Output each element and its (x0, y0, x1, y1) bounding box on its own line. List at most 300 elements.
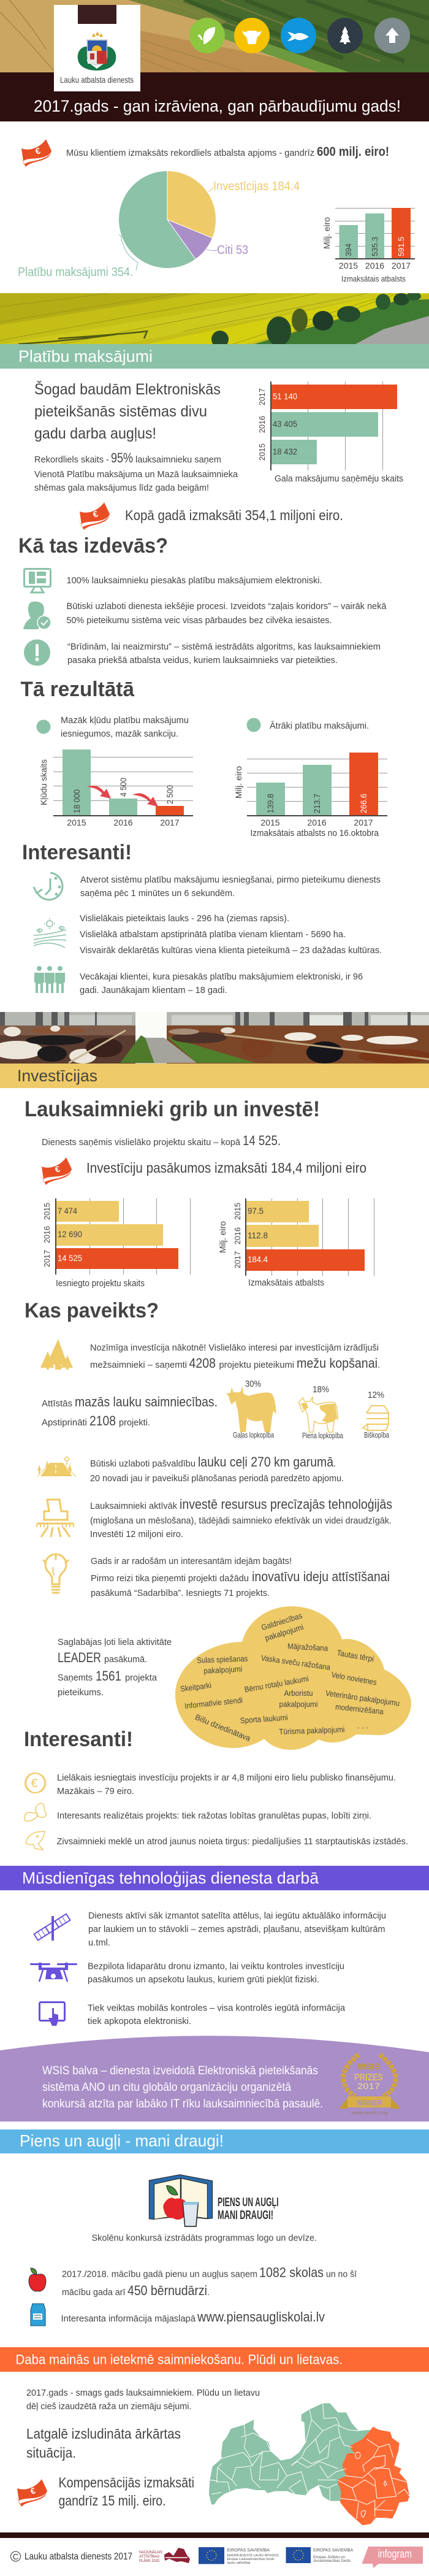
footer credit: C (13, 2552, 18, 2561)
text: Tiek veiktas mobilās kontroles – visa kontrolēs iegūtā informācija (88, 2003, 346, 2014)
logo: Nacionālais attīstības plāns: NACIONĀLAIS (139, 2550, 162, 2555)
icon: road (37, 1457, 76, 1477)
text: number of projects: Dienests saņēmis vislielāko projektu skaitu – kopā (42, 1137, 241, 1148)
intro text (66, 145, 389, 159)
item: precision technology (37, 1497, 392, 1539)
horizontal bar chart: investment support paid: 2016 (233, 1227, 242, 1244)
text (88, 2003, 346, 2026)
item: reminders (24, 639, 381, 666)
text: saņēma pēc 1 minūtes un 6 sekundēm. (80, 888, 235, 899)
icon: fish (281, 18, 316, 53)
bar chart: total support by year: 2016 (365, 261, 384, 270)
text (80, 875, 381, 899)
category icons row (189, 18, 410, 53)
text: number of projects: 14 525. (243, 1133, 281, 1148)
figure: dairy farming 18% (298, 1384, 344, 1440)
callout text: Investīciju pasākumos izmaksāti 184,4 miljoni eiro (86, 1160, 366, 1176)
heading: Interesanti! (investments): Interesanti! (24, 1728, 133, 1751)
text: Gads ir ar radošām un interesantām idejām bagāts! (91, 1556, 292, 1566)
text (80, 913, 382, 956)
text: . (207, 2287, 210, 2298)
icon: leaf (189, 18, 225, 53)
figure: beef farming 30%: Gaļas lopkopība (233, 1430, 275, 1439)
text: mežu kopšanai (297, 1355, 378, 1371)
fact: oldest and youngest clients (34, 966, 363, 995)
text block: record number: Rekordliels skaits - (34, 454, 109, 465)
text (66, 601, 387, 626)
word cloud: LEADER projects: Skeitparki (180, 1681, 212, 1693)
horizontal bar chart: submitted projects: 12 690 (58, 1229, 82, 1239)
text: Pirmo reizi tika pieņemti projekti dažādu (91, 1573, 249, 1584)
fact: largest field (34, 913, 382, 956)
text: number of projects (42, 1133, 281, 1148)
figure: dairy farming 18%: 18% (313, 1384, 329, 1395)
map: Latvia with affected municipalities (209, 2403, 409, 2525)
logo: EU maritime fund: EIROPAS SAVIENĪBA (313, 2548, 353, 2553)
text: Bezpilota lidaparātu dronu izmanto, lai veiktu kontroles investīciju (88, 1961, 344, 1971)
text: par laukiem un to stāvokli – zemes apstrādi, pļaušanu, atsevišķam kultūrām (88, 1924, 385, 1934)
horizontal bar chart: final payment recipients: 2016 (257, 416, 267, 433)
label: Investīcijas: Investīcijas 184.4 (213, 180, 300, 193)
bar chart: paid by 16 October: Milj. eiro (233, 766, 243, 799)
icon: money: € (34, 145, 42, 156)
callout text (59, 2474, 194, 2509)
icon: field (34, 918, 66, 948)
heading: Kā tas izdevās?: Kā tas izdevās? (18, 534, 168, 558)
photo: rapeseed field (0, 292, 429, 348)
word cloud: LEADER projects: Bišu dziedinātava (194, 1712, 252, 1743)
horizontal bar chart: investment support paid: 184.4 (248, 1254, 268, 1264)
section band: floods: Daba mainās un ietekmē saimniekošanu. Plūdi un lietavas. (16, 2352, 343, 2367)
award text: WSIS balva – dienesta izveidotā Elektroniskā pieteikšanās (42, 2064, 318, 2077)
text: LEADER: projekta (125, 1673, 158, 1683)
bar chart: paid by 16 October (233, 753, 387, 838)
logo: Nacionālais attīstības plāns (139, 2548, 190, 2563)
section band: Piens un augļi (0, 2129, 429, 2153)
text block: record number: Vienotā Platību maksājuma un Mazā lauksaimnieka (34, 469, 238, 480)
text: 50% pieteikumu sistēma veic visas pārbaudes bez cilvēka iesaistes. (66, 615, 332, 626)
header dark band (0, 72, 429, 121)
logo: Piens un augļi mani draugi (149, 2175, 278, 2226)
text block: record number (34, 450, 238, 493)
word cloud: LEADER projects: Vaska sveču ražošana (260, 1653, 332, 1672)
figure: dairy farming 18%: Piena lopkopība (302, 1431, 344, 1440)
horizontal bar chart: submitted projects: 14 525 (58, 1253, 82, 1263)
logo: EU maritime fund (286, 2547, 353, 2563)
text: 450 bērnudārzi (127, 2283, 207, 2298)
horizontal bar chart: final payment recipients: 2017 (257, 388, 267, 405)
text: 100% lauksaimnieku piesakās platību maksājumiem elektroniski. (66, 575, 322, 586)
fact: beans (25, 1803, 371, 1821)
text: pasākumā “Sadarbība”. Iesniegts 71 projekts. (91, 1588, 270, 1598)
section band: floods (0, 2347, 429, 2372)
word cloud: LEADER projects: Galdniecības (260, 1611, 303, 1632)
intro text: 600 milj. eiro! (317, 145, 389, 159)
result: fewer errors: iesniegumos, mazāk sankciju. (61, 729, 178, 739)
text: LEADER: LEADER (58, 1650, 101, 1665)
icon: money (16, 2479, 47, 2507)
large lead text: gadu darba augļus! (34, 425, 156, 442)
text block: record number: shēmas gala maksājumus līdz gada beigām! (34, 483, 209, 493)
logo: Lauku atbalsta dienests (54, 5, 140, 91)
text (62, 2264, 357, 2298)
text (90, 1497, 392, 1539)
text: tiek apkopota elektroniski. (88, 2016, 191, 2026)
word cloud: LEADER projects: Veterināro pakalpojumu (325, 1689, 400, 1708)
heading: Tā rezultātā: Tā rezultātā (21, 678, 135, 701)
caption: logo contest: Skolēnu konkursā izstrādāts programmas logo un devīze. (92, 2233, 317, 2244)
logo: infogram (362, 2547, 423, 2568)
section band: Investīcijas (0, 1064, 429, 1088)
horizontal bar chart: investment support paid: 112.8 (248, 1230, 268, 1240)
item: mobile controls (39, 2002, 346, 2026)
text: Nozīmīga investīcija nākotnē! Vislielāko interesi par investīcijām izrādījuši (90, 1343, 379, 1353)
text: (miglošana un mēslošana), tādējādi saimnieko efektīvāk un videi draudzīgāk. (90, 1516, 392, 1526)
icon: drone (30, 1963, 77, 1982)
logo: EU maritime fund: zivsaimniecības fonds (313, 2559, 351, 2563)
icon: exclamation (24, 639, 50, 666)
item: small farms text: mazās lauku saimniecības. (75, 1394, 218, 1409)
bar chart: total support by year: Milj. eiro (322, 217, 332, 249)
text: 20 novadi jau ir paveikuši plānošanas periodā paredzēto apjomu. (90, 1473, 344, 1484)
text: 2017 hard year: dēļ cieš izaudzētā raža un ziemāju sējumi. (26, 2401, 191, 2412)
icon: satellite (31, 1909, 75, 1948)
item: schools (29, 2264, 357, 2298)
item: internal processes (23, 601, 387, 629)
callout: 354,1 million (78, 502, 343, 530)
item: drone (30, 1961, 344, 1985)
bar chart: paid by 16 October: 2016 (307, 818, 327, 827)
text block: record number: lauksaimnieku saņem (135, 454, 221, 465)
text: Vecākajai klientei, kura piesakās platību maksājumiem elektroniski, ir 96 (80, 972, 363, 982)
fact: fish producers (26, 1831, 408, 1850)
item: small farms text: Attīstās (42, 1398, 72, 1409)
horizontal bar chart: final payment recipients (257, 381, 403, 484)
word cloud: LEADER projects: Bērnu rotaļu laukumi (244, 1674, 309, 1694)
text: LEADER: Saņemts (58, 1673, 93, 1683)
horizontal bar chart: submitted projects: 2017 (42, 1250, 51, 1267)
crest (78, 31, 116, 71)
footer credit: Lauku atbalsta dienests 2017 (25, 2551, 132, 2562)
bar chart: total support by year: Izmaksātais atbalsts (341, 274, 406, 283)
word cloud: LEADER projects: pakalpojumi (264, 1622, 305, 1643)
logo wordmark: PIENS UN AUGĻI (218, 2196, 278, 2209)
word cloud: LEADER projects: pakalpojumi (279, 1700, 318, 1709)
award text: konkursā atzīta par labāko IT rīku lauksaimniecībā pasaulē. (42, 2098, 323, 2110)
result: fewer errors (37, 715, 189, 739)
figure: beekeeping 12%: 12% (368, 1390, 384, 1400)
result: fewer errors: Mazāk kļūdu platību maksājumu (61, 715, 189, 726)
text: www.piensaugliskolai.lv (197, 2309, 325, 2325)
bar chart: paid by 16 October: 213.7 (312, 794, 322, 813)
text: LEADER: pieteikums. (58, 1687, 104, 1698)
horizontal bar chart: submitted projects: Iesniegto projektu skaits (56, 1278, 145, 1289)
horizontal bar chart: investment support paid: Izmaksātais atbalsts (248, 1278, 324, 1288)
text: inovatīvu ideju attīstīšanai (252, 1569, 390, 1584)
figure: beekeeping 12% (363, 1390, 390, 1439)
logo: infogram: infogram (378, 2548, 412, 2560)
icon: cow head (234, 18, 270, 53)
text (80, 972, 363, 995)
text: investē resursus precīzajās tehnoloģijās (180, 1497, 392, 1512)
logo: EU rural fund: Eiropas Lauksaimniecības fonds (227, 2558, 275, 2561)
icon: beans (25, 1803, 46, 1821)
text: 2017 hard year: 2017.gads - smags gads lauksaimniekiem. Plūdu un lietavu (26, 2388, 260, 2398)
text: Atverot sistēmu platību maksājumu iesniegšanai, pirmo pieteikumu dienests (80, 875, 381, 885)
item: website (31, 2304, 325, 2326)
bar chart: error count: 2016 (113, 818, 133, 827)
item: innovative ideas (44, 1554, 390, 1598)
text: pasākumos un apsekotu laukus, kuriem grūti piekļūt fiziski. (88, 1974, 319, 1985)
heading: Lauksaimnieki grib un investē!: Lauksaimnieki grib un investē! (25, 1097, 320, 1121)
bar chart: paid by 16 October: 2017 (354, 818, 373, 827)
bar chart: error count: 2015 (67, 818, 86, 827)
logo: EU rural fund: lauku attīstībai (227, 2561, 250, 2565)
horizontal bar chart: investment support paid: 2015 (233, 1203, 242, 1220)
text (90, 1343, 380, 1371)
intro text: Mūsu klientiem izmaksāts rekordliels atbalsta apjoms - gandrīz (66, 148, 314, 158)
icon: arrow up (374, 18, 410, 53)
word cloud: LEADER projects: Arboristu (284, 1689, 313, 1698)
icon: tree (327, 18, 363, 53)
text: LEADER (58, 1637, 172, 1698)
figure: beekeeping 12%: Biškopība (364, 1430, 390, 1439)
callout text: Kompensācijās izmaksāti (59, 2474, 194, 2490)
text: lauku ceļi 270 km garumā (198, 1454, 334, 1470)
bar chart: total support by year: 591.5 (397, 237, 406, 256)
item: small farms text (42, 1394, 218, 1428)
icon: euro coin (25, 1773, 46, 1793)
text: Lauksaimnieki aktīvāk (90, 1501, 177, 1511)
icon: money: € (92, 508, 99, 519)
figure: beef farming 30%: 30% (245, 1379, 261, 1389)
pie chart: support by category (18, 171, 300, 279)
label: Platību maksājumi: Platību maksājumi 354. (18, 266, 133, 279)
heading: Interesanti!: Interesanti! (22, 841, 132, 864)
text (90, 1454, 344, 1484)
item: satellite (31, 1909, 386, 1948)
header photo: aerial fields and forest (0, 0, 429, 72)
horizontal bar chart: investment support paid: Milj. eiro (218, 1221, 227, 1253)
icon: clock (34, 873, 63, 900)
text: Interesants realizētais projekts: tiek ražotas lobītas granulētas pupas, lobīti zirņi. (57, 1811, 371, 1821)
word cloud: LEADER projects: Tautas tērpi (336, 1648, 374, 1663)
horizontal bar chart: final payment recipients: 2015 (257, 443, 267, 461)
text: pasaka priekšā atbalsta veidus, kuriem lauksaimnieks var pieteikties. (67, 655, 338, 665)
panel: WSIS award (0, 2036, 429, 2122)
text (91, 1556, 390, 1598)
text: un no šī (326, 2269, 357, 2279)
horizontal bar chart: investment support paid (218, 1198, 374, 1288)
logo: Nacionālais attīstības plāns: PLĀNS 2020 (139, 2559, 160, 2563)
award text (42, 2064, 323, 2110)
label: Citi: Citi 53 (217, 243, 248, 257)
text: 2017 hard year (26, 2388, 260, 2412)
logo: EU maritime fund: Eiropas Jūrlietu un (313, 2556, 345, 2559)
text (67, 642, 381, 665)
text: LEADER: pasākumā. (104, 1654, 147, 1665)
bar chart: total support by year: 2015 (339, 261, 358, 270)
icon: euro coin: € (31, 1777, 38, 1790)
text: . (378, 1360, 380, 1370)
result: faster payments (246, 718, 369, 732)
horizontal bar chart: submitted projects: 2015 (42, 1203, 51, 1220)
logo: EU rural fund: EIROPAS SAVIENĪBA (227, 2548, 270, 2553)
text: Investēti 12 miljoni eiro. (90, 1529, 183, 1539)
word cloud: LEADER projects (175, 1606, 411, 1750)
bar chart: paid by 16 October: Izmaksātais atbalsts no 16.oktobra (250, 828, 379, 838)
result: faster payments: Ātrāki platību maksājumi. (270, 721, 369, 731)
section band: technologies: Mūsdienīgas tehnoloģijas dienesta darbā (22, 1869, 319, 1887)
large lead text (34, 380, 221, 442)
text (57, 1773, 396, 1796)
badge: WSIS Prizes 2017 winner: PRIZES (354, 2072, 383, 2083)
section band: Platību maksājumi (0, 344, 429, 369)
text: Zivsaimnieki meklē un atrod jaunus noieta tirgus: piedalījušies 11 starptautiskās izstādēs. (56, 1836, 408, 1847)
text: LEADER: Saglabājas ļoti liela aktivitāte (58, 1637, 172, 1647)
word cloud: LEADER projects: Tūrisma pakalpojumi (279, 1725, 345, 1736)
heading: Kas paveikts?: Kas paveikts? (25, 1299, 159, 1322)
bar chart: error count: 2 500 (165, 785, 175, 804)
icon: monitor (25, 569, 50, 592)
bar chart: paid by 16 October: 266.6 (359, 794, 368, 813)
horizontal bar chart: submitted projects: 7 474 (58, 1206, 77, 1216)
icon: money: € (54, 1163, 61, 1175)
title: 2017.gads - gan izrāviena, gan pārbaudījumu gads! (34, 97, 401, 115)
text: 1082 skolas (259, 2264, 324, 2280)
text: emergency in Latgale (26, 2426, 181, 2461)
icon: tablet with hand (39, 2002, 65, 2026)
text: emergency in Latgale: situācija. (26, 2445, 76, 2461)
arrow: 2015 to 2016 (87, 786, 111, 799)
horizontal bar chart: submitted projects: 2016 (42, 1226, 51, 1243)
badge: WSIS Prizes 2017 winner: WINNER (357, 2098, 382, 2107)
fact: first application (34, 873, 381, 900)
icon: money: € (29, 2485, 37, 2496)
icon: apple (29, 2268, 46, 2291)
icon: light bulb (44, 1554, 68, 1593)
section band: technologies (0, 1866, 429, 1890)
large lead text: pieteikšanās sistēmas divu (34, 403, 207, 420)
intro line with money icon (20, 139, 389, 167)
icon: tractor (37, 1500, 74, 1537)
bar chart: error count: 18 000 (72, 789, 82, 813)
text: Vislielākā atbalstam apstiprinātā platība vienam klientam - 5690 ha. (80, 929, 346, 940)
footer dark bar (0, 2532, 429, 2538)
text: 4208 (189, 1355, 216, 1371)
bar chart: error count: Kļūdu skaits (39, 759, 48, 805)
text: 2017./2018. mācību gadā pienu un augļus saņem (62, 2269, 257, 2279)
text (61, 2309, 325, 2325)
logo wordmark (218, 2196, 278, 2222)
icon: fish (26, 1831, 45, 1850)
text: Visvairāk deklarētās kultūras viena klienta pieteikumā – 23 dažādas kultūras. (80, 945, 382, 956)
bar chart: error count: 4 500 (118, 778, 128, 797)
icon: money (20, 139, 51, 167)
text (88, 1961, 344, 1985)
large lead text: Šogad baudām Elektroniskās (34, 380, 221, 398)
section band: Investīcijas: Investīcijas (17, 1067, 97, 1085)
badge: WSIS Prizes 2017 winner: www.wsis.org (351, 2111, 387, 2115)
callout text: Kopā gadā izmaksāti 354,1 miljoni eiro. (125, 507, 343, 523)
item: 100% electronic (25, 569, 322, 592)
horizontal bar chart: submitted projects (42, 1198, 190, 1289)
section band: Piens un augļi: Piens un augļi - mani draugi! (20, 2132, 224, 2150)
horizontal bar chart: final payment recipients: 51 140 (273, 391, 297, 401)
icon: money (40, 1157, 72, 1185)
text (88, 1911, 386, 1948)
item: rural roads (37, 1454, 344, 1484)
callout: compensation (16, 2474, 194, 2509)
word cloud: LEADER projects: Informatīvie stendi (184, 1695, 243, 1711)
icon: people (34, 966, 65, 993)
word cloud: LEADER projects: modernizēšana (335, 1702, 384, 1716)
logo: EU rural fund: EIROPA INVESTĒ LAUKU APVIDOS (227, 2553, 279, 2558)
bar chart: error count: 2017 (160, 818, 180, 827)
word cloud: LEADER projects: Velo novietnes (331, 1670, 378, 1687)
word cloud: LEADER projects: pakalpojumi (203, 1664, 243, 1676)
bar chart: total support by year: 535.3 (370, 237, 379, 256)
item: small farms text: 2108 (89, 1413, 116, 1428)
bar chart: total support by year: 2017 (392, 261, 411, 270)
text: “Brīdinām, lai neaizmirstu” – sistēmā iestrādāts algoritms, kas lauksaimniekiem (67, 642, 381, 652)
bar chart: error count (39, 749, 193, 827)
text: gadi. Jaunākajam klientam – 18 gadi. (80, 985, 227, 995)
word cloud: LEADER projects: Sulas spiešanas (197, 1654, 248, 1665)
logo wordmark: MANI DRAUGI! (218, 2209, 273, 2222)
text: emergency in Latgale: Latgalē izsludināta ārkārtas (26, 2426, 181, 2442)
text: Interesanta informācija mājaslapā (61, 2313, 196, 2324)
text: LEADER: 1561 (96, 1668, 121, 1684)
bar chart: total support by year: 394 (344, 243, 353, 256)
item: small farms text: Apstiprināti (42, 1417, 87, 1428)
callout: 184,4 million (40, 1157, 366, 1185)
horizontal bar chart: final payment recipients: Gala maksājumu saņēmēju skaits (275, 473, 403, 484)
icon: trees (40, 1339, 73, 1370)
bar chart: paid by 16 October: 139.8 (265, 794, 275, 813)
bar chart: total support by year (322, 208, 415, 283)
horizontal bar chart: final payment recipients: 18 432 (273, 447, 297, 456)
logo: Nacionālais attīstības plāns: ATTĪSTĪBAS (139, 2555, 159, 2559)
photo: cow barn (0, 1012, 429, 1064)
text block: record number: 95% (111, 450, 133, 466)
icon: money (78, 502, 110, 530)
icon: person with check (23, 602, 51, 629)
text: Lielākais iesniegtais investīciju projekts ir ar 4,8 miljoni eiro lielu publisko finansējumu. (57, 1773, 396, 1783)
book with apple and milk (149, 2175, 213, 2226)
horizontal bar chart: final payment recipients: 43 405 (273, 419, 297, 429)
horizontal bar chart: investment support paid: 2017 (233, 1251, 242, 1268)
item: forestry (40, 1339, 380, 1371)
badge: WSIS Prizes 2017 winner (339, 2055, 401, 2115)
callout text: gandrīz 15 milj. eiro. (59, 2493, 165, 2509)
text: mācību gada arī (62, 2287, 126, 2298)
text: Būtiski uzlaboti pašvaldību (90, 1459, 196, 1469)
text: . (333, 1459, 336, 1469)
text: Dienests aktīvi sāk izmantot satelīta attēlus, lai iegūtu aktuālāko informāciju (88, 1911, 386, 1921)
word cloud: LEADER projects: Mājražošana (287, 1641, 328, 1653)
text: Būtiski uzlaboti dienesta iekšējie procesi. Izveidots “zaļais koridors” – vairāk nekā (66, 601, 387, 611)
figure: beef farming 30% (226, 1379, 276, 1439)
text: u.tml. (88, 1938, 110, 1948)
word cloud: LEADER projects: . . . (357, 1721, 368, 1730)
arrow: 2016 to 2017 (132, 793, 158, 807)
fact: largest project (25, 1773, 396, 1796)
item: small farms text: projekti. (119, 1417, 150, 1428)
text: mežsaimnieki – saņemti (90, 1360, 187, 1370)
logo: EU rural fund (199, 2547, 279, 2565)
logo caption: Lauku atbalsta dienests (60, 75, 134, 85)
